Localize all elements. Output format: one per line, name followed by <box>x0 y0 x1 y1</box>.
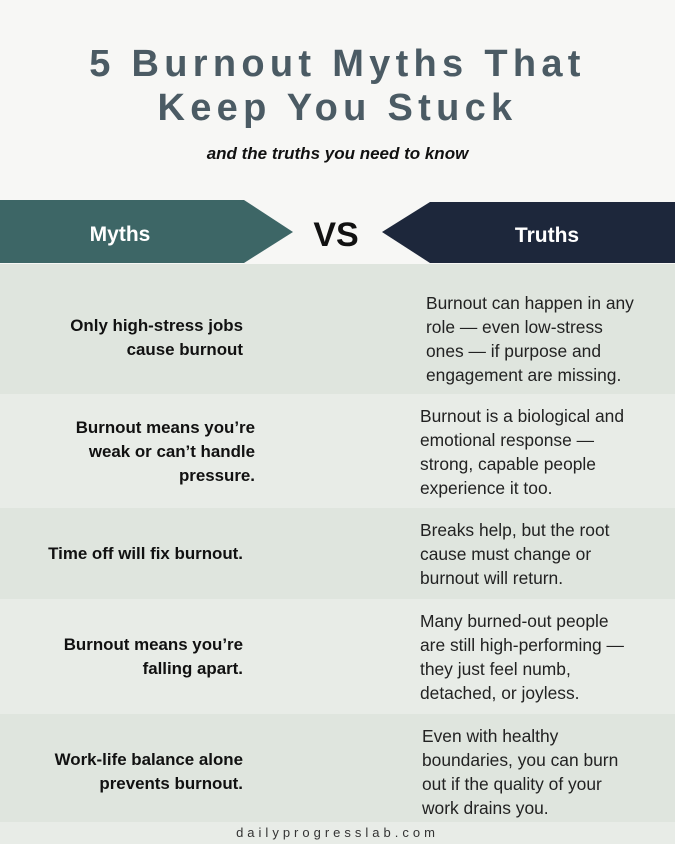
row 1: cause burnout <box>127 340 243 359</box>
row 2 <box>0 394 675 508</box>
row 3: Time off will fix burnout. <box>48 544 243 563</box>
vs label: VS <box>313 216 359 254</box>
row 4: Many burned-out people <box>420 611 609 631</box>
row 5 <box>0 714 675 822</box>
title <box>89 43 586 129</box>
row 5: boundaries, you can burn <box>422 750 618 770</box>
footer: dailyprogresslab.com <box>236 825 439 840</box>
myths banner: Myths <box>90 223 150 246</box>
footer <box>0 822 675 844</box>
row 2: strong, capable people <box>420 454 596 474</box>
row 1: Burnout can happen in any <box>426 293 634 313</box>
row 5: prevents burnout. <box>99 774 243 793</box>
row 1: Only high-stress jobs <box>70 316 243 335</box>
truths banner: Truths <box>515 224 579 247</box>
row 1 <box>0 264 675 394</box>
header banners <box>0 200 675 263</box>
title: 5 Burnout Myths That <box>89 43 586 85</box>
row 2: weak or can’t handle <box>89 442 255 461</box>
row 4: falling apart. <box>143 659 243 678</box>
row 1: engagement are missing. <box>426 365 621 385</box>
row 1: ones — if purpose and <box>426 341 601 361</box>
row 2: Burnout means you’re <box>76 418 255 437</box>
row 5: Even with healthy <box>422 726 558 746</box>
row 2: experience it too. <box>420 478 552 498</box>
row 2: emotional response — <box>420 430 594 450</box>
myths banner <box>0 200 293 263</box>
row 3: burnout will return. <box>420 568 563 588</box>
row 3: Breaks help, but the root <box>420 520 609 540</box>
row 2: pressure. <box>179 466 255 485</box>
row 4 <box>0 599 675 714</box>
row 3 <box>0 508 675 599</box>
row 5: out if the quality of your <box>422 774 602 794</box>
row 4: they just feel numb, <box>420 659 571 679</box>
title: Keep You Stuck <box>158 87 517 129</box>
row 4: detached, or joyless. <box>420 683 580 703</box>
row 4: are still high-performing — <box>420 635 624 655</box>
truths banner <box>382 202 675 263</box>
row 1: role — even low-stress <box>426 317 603 337</box>
row 3: cause must change or <box>420 544 591 564</box>
row 5: work drains you. <box>422 798 549 818</box>
row 2: Burnout is a biological and <box>420 406 624 426</box>
subtitle: and the truths you need to know <box>207 144 468 163</box>
row 4: Burnout means you’re <box>64 635 243 654</box>
row 5: Work-life balance alone <box>55 750 243 769</box>
